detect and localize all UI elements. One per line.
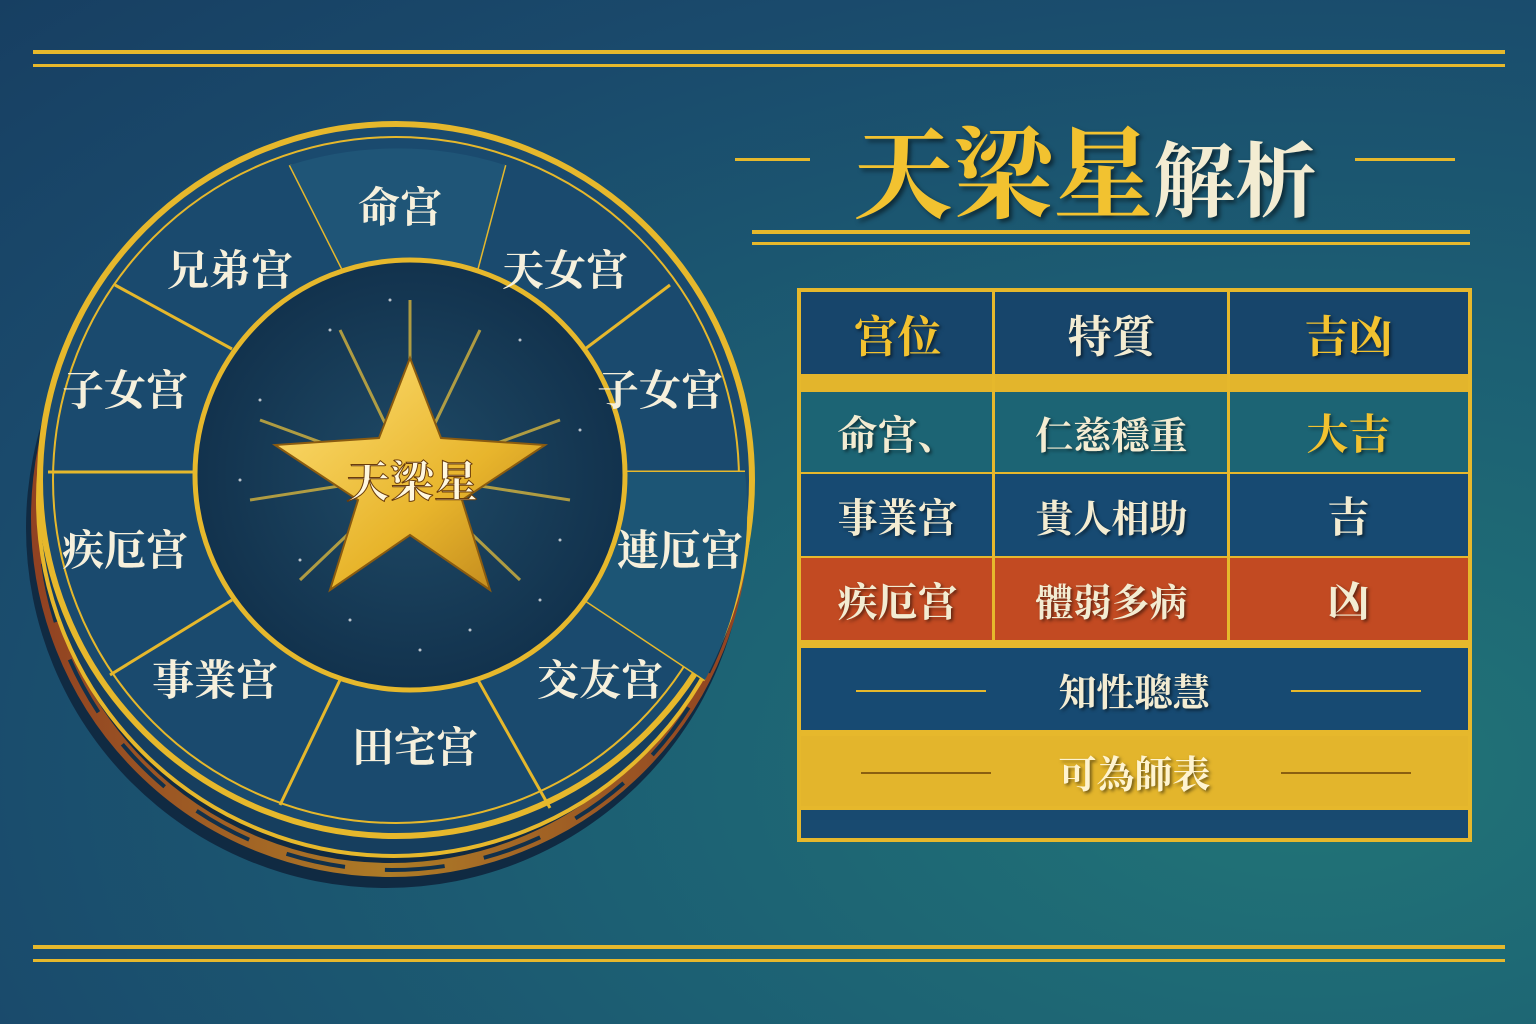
header row: 吉凶 — [1304, 301, 1392, 365]
wheel rim (3D edge) — [26, 144, 750, 888]
icon: star with 天梁星 — [275, 358, 545, 590]
wheel face — [40, 124, 752, 836]
row 3: 體弱多病 — [1035, 572, 1188, 626]
row: 知性聰慧 — [801, 648, 1468, 730]
row 2: 貴人相助 — [1035, 488, 1188, 542]
header row: 特質 — [1068, 301, 1156, 365]
palace labels: 疾厄宫 — [62, 518, 188, 578]
row: 可為師表 — [801, 736, 1468, 806]
row 1 — [801, 392, 1468, 472]
row 1: 大吉 — [1306, 402, 1390, 462]
top border lines — [33, 50, 1505, 67]
table — [797, 288, 1472, 842]
title — [735, 95, 1470, 245]
title: 天梁星解析 — [853, 95, 1317, 239]
row: 知性聰慧: 知性聰慧 — [1058, 662, 1210, 716]
inner starry circle — [195, 260, 625, 690]
palace labels: 事業宫 — [152, 648, 278, 708]
palace labels: 命宫 — [358, 175, 442, 235]
row 3: 凶 — [1327, 569, 1370, 629]
palace labels — [62, 175, 743, 775]
row: 可為師表: 可為師表 — [1058, 744, 1210, 798]
row 1: 仁慈穩重 — [1035, 404, 1188, 460]
palace labels: 兄弟宫 — [167, 238, 293, 298]
palace labels: 田宅宫 — [352, 715, 478, 775]
palace labels: 子女宫 — [597, 358, 723, 418]
row 2: 事業宫 — [838, 486, 958, 544]
palace labels: 天女宫 — [502, 238, 628, 298]
row 2 — [801, 474, 1468, 556]
palace labels: 交友宫 — [537, 648, 663, 708]
bottom border lines — [33, 945, 1505, 962]
row 3: 疾厄宫 — [838, 570, 958, 628]
row 2: 吉 — [1327, 485, 1370, 545]
row 3 — [801, 558, 1468, 640]
column dividers — [992, 292, 995, 640]
header row — [801, 292, 1468, 374]
header row: 宫位 — [854, 301, 942, 365]
palace labels: 連厄宫 — [617, 518, 743, 578]
row 1: 命宫、 — [838, 404, 958, 460]
icon: star with 天梁星: 天梁星 — [346, 446, 478, 510]
palace labels: 子女宫 — [62, 358, 188, 418]
wheel chart — [26, 121, 755, 888]
